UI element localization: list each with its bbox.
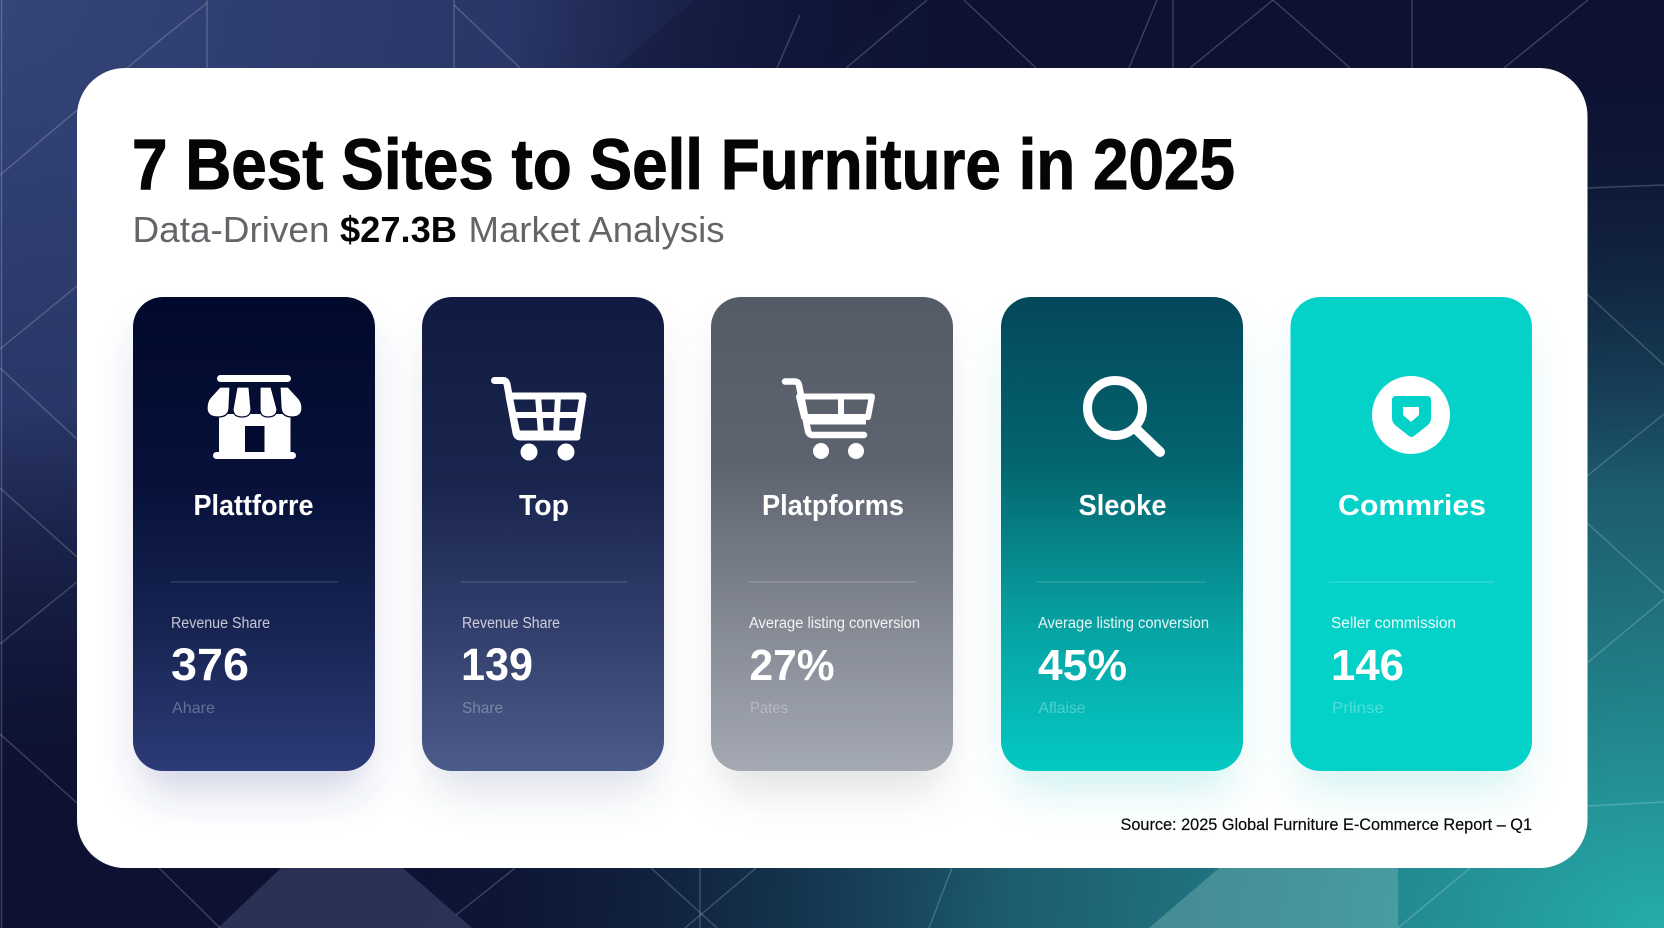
metric value: 146 — [1331, 641, 1404, 690]
metric value: 376 — [171, 639, 249, 690]
card heading: Top — [519, 490, 569, 522]
subtitle: Market Analysis — [468, 209, 724, 250]
icon: storefront — [207, 375, 302, 459]
metric value: 27% — [750, 641, 834, 690]
subtitle: Data-Driven — [132, 209, 330, 250]
title: 7 Best Sites to Sell Furniture in 2025 — [132, 126, 1235, 205]
card 3: Platpforms — [711, 297, 953, 771]
metric value: 139 — [461, 639, 533, 690]
subtitle: $27.3B — [340, 209, 457, 250]
icon: shopping cart — [785, 382, 872, 459]
card heading: Platpforms — [762, 490, 904, 522]
metric label: Seller commission — [1331, 615, 1456, 632]
metric note: Pates — [750, 700, 788, 717]
metric label: Revenue Share — [171, 615, 270, 632]
card 5: Commries — [1290, 297, 1532, 771]
metric note: Prlinse — [1332, 700, 1384, 717]
metric value: 45% — [1038, 641, 1127, 690]
card heading: Plattforre — [194, 490, 314, 522]
metric label: Average listing conversion — [1038, 615, 1209, 632]
white panel — [77, 68, 1588, 868]
card shadows — [140, 330, 1525, 792]
metric note: Aflaise — [1038, 700, 1086, 717]
source note: Source: 2025 Global Furniture E-Commerce Report – Q1 — [1120, 816, 1532, 834]
icon: shopping cart with grid — [494, 380, 583, 460]
metric label: Average listing conversion — [749, 615, 920, 632]
card heading: Sleoke — [1078, 490, 1166, 522]
metric label: Revenue Share — [462, 615, 560, 632]
icon: shield in circle — [1372, 376, 1450, 454]
metric note: Ahare — [172, 700, 215, 717]
icon: magnifying glass — [1088, 380, 1160, 452]
card 2: Top — [422, 297, 664, 771]
card heading: Commries — [1338, 490, 1486, 522]
metric note: Share — [462, 700, 503, 717]
card 4: Sleoke — [1001, 297, 1243, 771]
card 1: Plattforre — [133, 297, 375, 771]
